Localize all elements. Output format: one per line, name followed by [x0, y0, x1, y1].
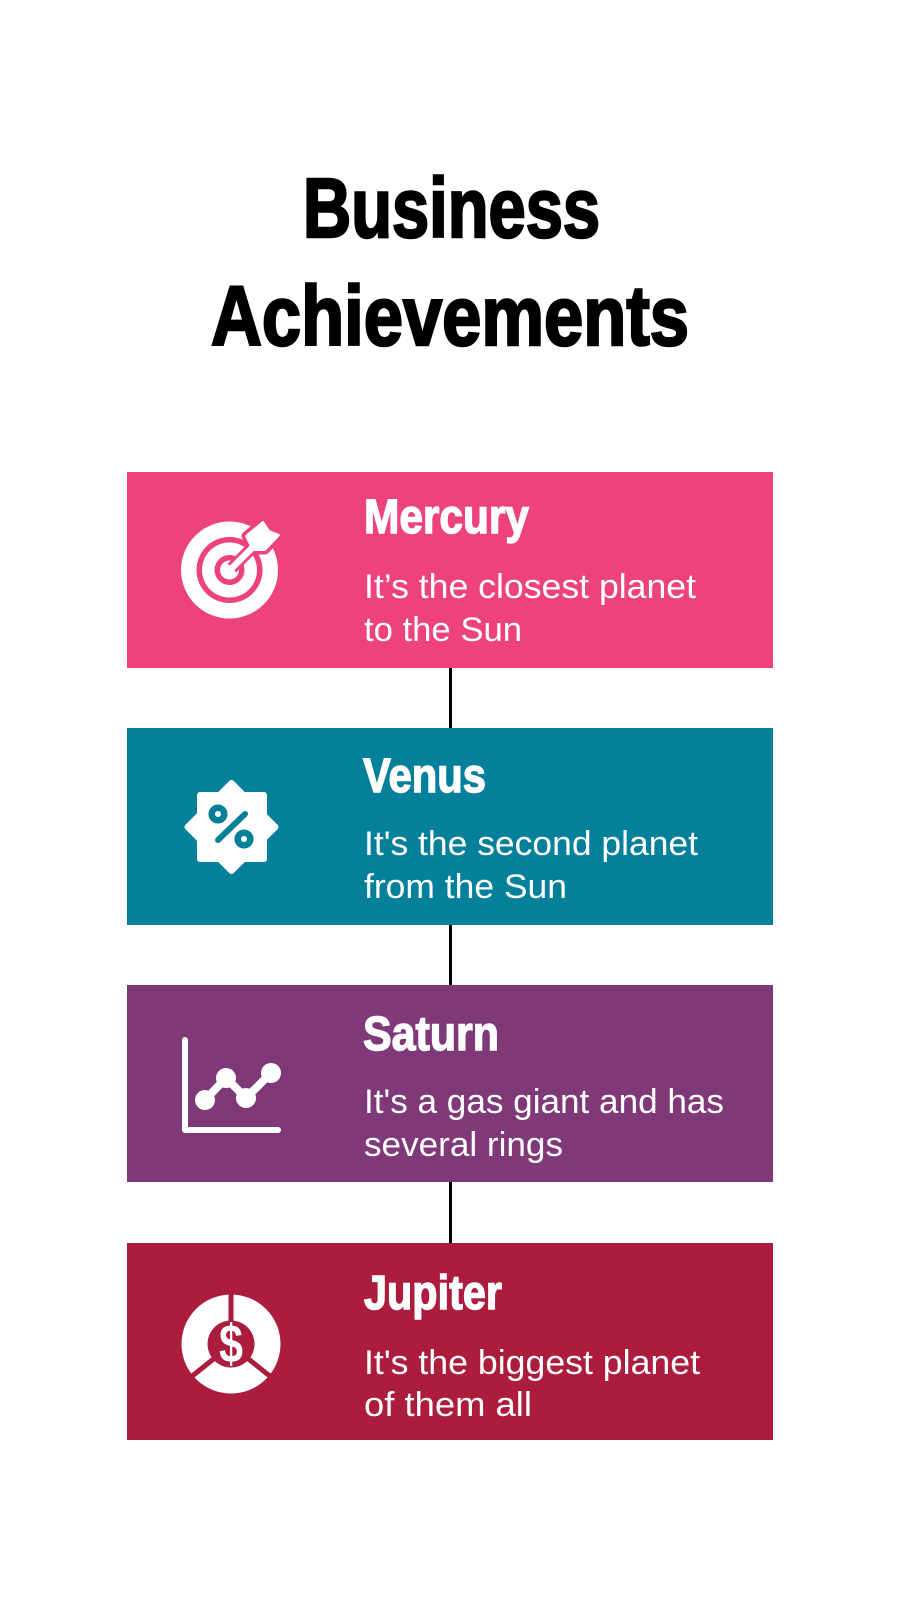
connector: Mercury to Venus [449, 668, 452, 728]
icon: dollar pie chart: $ [219, 1314, 243, 1374]
text: Venus description [364, 825, 699, 906]
panel: Saturn [127, 985, 773, 1182]
icon: line chart [185, 1040, 281, 1130]
connector: Saturn to Jupiter [449, 1182, 452, 1243]
title: Achievements [211, 269, 689, 363]
text: Venus description: It's the second planet [364, 825, 699, 863]
connector: Venus to Saturn [449, 925, 452, 985]
text: Mercury description: to the Sun [364, 611, 522, 649]
heading: Venus: Venus [363, 750, 486, 803]
panel: Jupiter [127, 1243, 773, 1440]
panel: Mercury [127, 472, 773, 668]
heading: Saturn: Saturn [363, 1008, 499, 1061]
text: Jupiter description: It's the biggest planet [364, 1344, 701, 1382]
text: Mercury description [364, 568, 697, 649]
text: Mercury description: It’s the closest planet [364, 568, 697, 606]
icon: percent badge [188, 783, 276, 871]
text: Saturn description: several rings [364, 1126, 563, 1164]
heading: Mercury: Mercury [364, 491, 529, 544]
text: Saturn description: It's a gas giant and has [364, 1083, 724, 1121]
icon: dollar pie chart [181, 1290, 281, 1394]
text: Venus description: from the Sun [364, 868, 567, 906]
icon: target with arrow [181, 522, 279, 618]
heading: Jupiter: Jupiter [364, 1267, 502, 1320]
title: Business [303, 161, 600, 255]
text: Jupiter description: of them all [364, 1386, 532, 1424]
text: Saturn description [364, 1083, 724, 1164]
text: Jupiter description [364, 1344, 701, 1424]
title [211, 161, 689, 363]
panel: Venus [127, 728, 773, 925]
